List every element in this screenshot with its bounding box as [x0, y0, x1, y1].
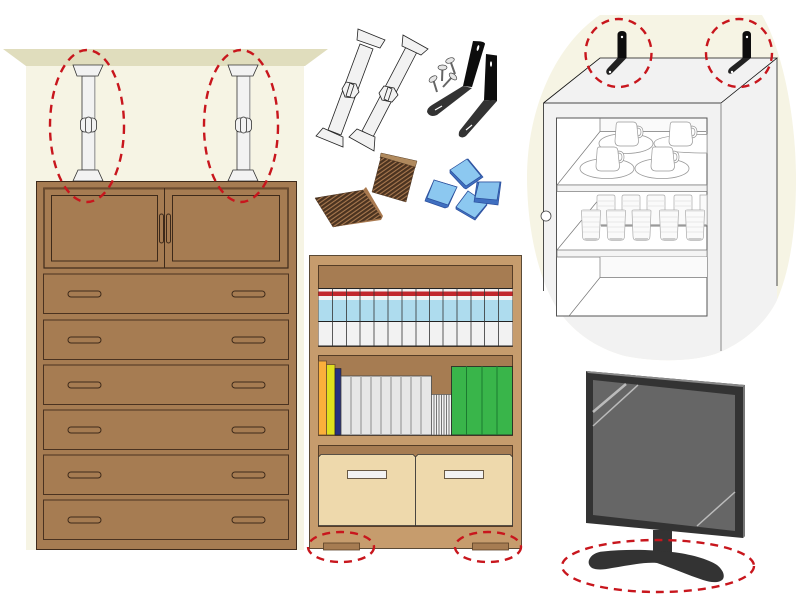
loose tension pole A — [316, 29, 385, 147]
door knob — [541, 211, 551, 221]
drawer 6 — [44, 500, 288, 540]
cabinet edges — [544, 58, 777, 291]
highlight: left bookcase foot — [308, 532, 374, 562]
back row plates — [599, 134, 707, 154]
storage box right — [416, 454, 512, 526]
box handle left — [348, 470, 386, 478]
cabinet front right edge — [720, 103, 722, 351]
tension pole left — [73, 65, 103, 181]
bottom shelf — [318, 446, 512, 526]
highlight: monitor base — [562, 540, 754, 592]
monitor stand neck — [653, 530, 672, 554]
box handle right — [444, 470, 484, 478]
highlight: left wall bracket — [586, 19, 652, 87]
panel: monitor — [586, 371, 745, 582]
panel: chest of drawers with tension poles — [3, 49, 328, 550]
highlight: left tension pole — [50, 50, 124, 202]
grey books — [341, 376, 432, 435]
top shelf — [318, 266, 512, 346]
green binders — [452, 366, 512, 435]
screen glare — [593, 384, 735, 526]
highlight: right tension pole — [204, 50, 278, 202]
plates and cups — [580, 122, 707, 178]
monitor screen — [593, 380, 735, 531]
highlight: right bookcase foot — [455, 532, 521, 562]
bracket right — [459, 54, 497, 138]
blue gel pads — [425, 159, 501, 220]
binders row — [318, 288, 512, 346]
drawer 2 — [44, 320, 288, 360]
pad flat — [315, 187, 383, 227]
L-brackets and screws — [427, 41, 497, 138]
screws — [428, 57, 458, 92]
cabinet body fill — [544, 58, 777, 370]
drawer 3 — [44, 365, 288, 404]
bracket left — [427, 41, 485, 116]
bookcase feet front — [324, 543, 508, 550]
bookcase body — [310, 256, 522, 548]
drawer 4 — [44, 410, 288, 450]
drawer 5 — [44, 455, 288, 494]
monitor frame — [586, 371, 745, 538]
yellow book — [326, 364, 335, 435]
wall background — [26, 66, 304, 550]
gel pad 2 — [450, 159, 483, 189]
wood anti-tip pads — [315, 153, 417, 227]
wall bracket left — [606, 31, 626, 75]
gel pad 4 — [474, 182, 501, 205]
glass interior — [556, 118, 707, 316]
cabinet top outline — [544, 58, 777, 103]
glasses front row — [582, 210, 704, 240]
glasses back row — [597, 195, 707, 226]
panel: tension pole parts — [316, 29, 428, 151]
wall bracket right — [728, 31, 751, 74]
navy book — [335, 368, 341, 435]
pad upright — [372, 153, 417, 202]
panel: bookcase — [310, 256, 522, 550]
gel pad 3 — [456, 191, 487, 220]
gel pad 1 — [425, 180, 457, 208]
drawer 1 — [44, 274, 288, 314]
tension pole right — [228, 65, 258, 181]
panel: glass cabinet — [527, 15, 796, 370]
monitor stand base — [589, 550, 724, 582]
storage box left — [318, 454, 416, 526]
chest body — [36, 182, 296, 550]
orange book — [318, 361, 326, 435]
background blob wall — [527, 15, 796, 360]
cabinet doors — [44, 188, 288, 268]
loose tension pole B — [349, 35, 428, 151]
highlight: right wall bracket — [706, 19, 772, 87]
ceiling — [3, 49, 328, 66]
thin striped books — [432, 394, 452, 435]
middle shelf — [318, 356, 512, 436]
front row plates — [580, 158, 689, 178]
